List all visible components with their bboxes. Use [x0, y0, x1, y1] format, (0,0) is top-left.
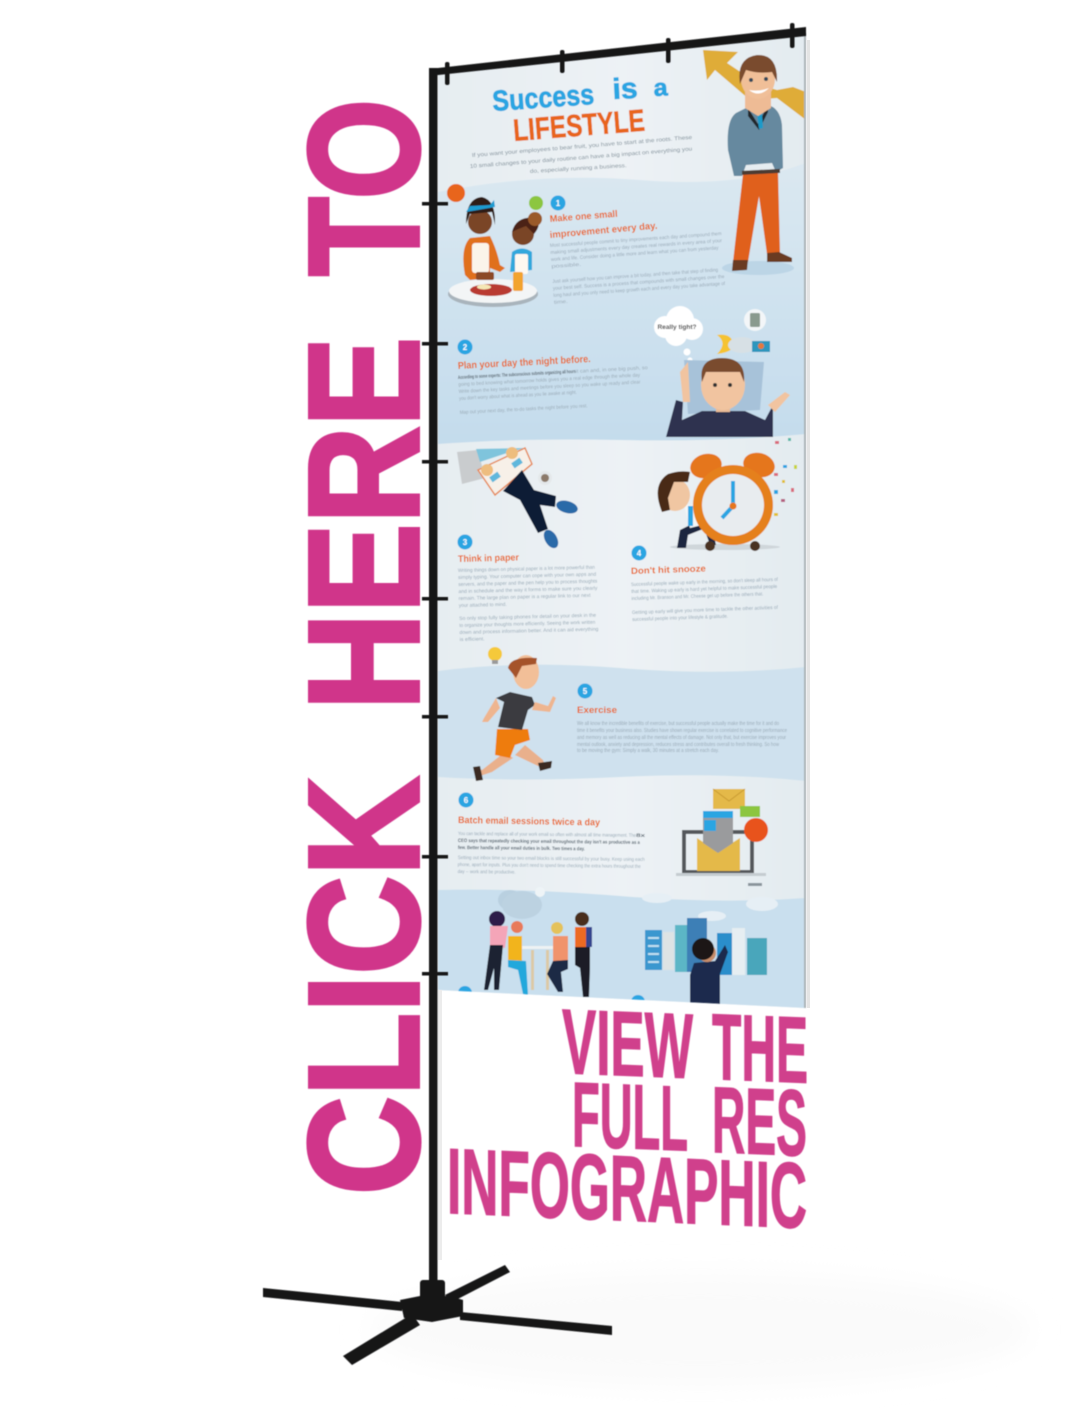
- pole: [429, 68, 438, 1293]
- step 3 body text: your attached to mind.: [459, 602, 507, 609]
- step 1 body text: [550, 231, 726, 306]
- step 4 illustration: alarm clock with boy: [658, 449, 780, 551]
- step 4 body text: Getting up early will give you more time to tackle the other activities of: [632, 605, 779, 616]
- step 1 body text: time.: [554, 299, 568, 306]
- step 2 body text: Write down the key tasks and meetings before you sleep so you wake up ready and clear: [459, 379, 641, 395]
- step 4 number badge: 4: [637, 549, 642, 558]
- side clamps: [422, 202, 448, 976]
- step 5 number badge: 5: [583, 687, 588, 696]
- step 3 body text: and in schedule and the way it forms to make sure you clearly: [458, 586, 598, 595]
- large vertical headline: CLICK: [277, 777, 452, 1195]
- large vertical headline: TO: [277, 99, 452, 276]
- step 2 illustration: thought bubbles: [654, 306, 770, 362]
- bottom scene: clouds: [498, 887, 778, 921]
- view the full res text: INFOGRAPHIC: [447, 1129, 807, 1248]
- title: a: [653, 74, 669, 102]
- view the full res text: FULL: [572, 1063, 688, 1171]
- banner right edge: [804, 33, 807, 1008]
- step 5 body text: We all know the incredible benefits of exercise, but successful people actually make the time for it and do: [577, 721, 779, 727]
- step 4 body text: Successful people wake up early in the morning, so don't sleep all hours of: [631, 577, 779, 588]
- step 4 number badge: [632, 546, 646, 560]
- step 4 body text: successful people into your lifestyle & gratitude.: [632, 614, 728, 623]
- confetti: [774, 438, 797, 516]
- step 2 body text: [458, 365, 650, 416]
- step 6 body text: 8x: [636, 833, 645, 839]
- step 6 number badge: 6: [464, 796, 469, 805]
- title: LIFESTYLE: [512, 103, 646, 148]
- title: Success: [491, 79, 595, 118]
- bottom scene: partial badges: [458, 986, 645, 1002]
- step 4 heading: Don't hit snooze: [631, 563, 706, 576]
- step 3 body text: to organize your thoughts more efficiently. Seeing the work written: [459, 620, 596, 629]
- title: [492, 76, 670, 142]
- large vertical headline: [277, 99, 452, 1195]
- intro text: [470, 135, 692, 175]
- title: is: [612, 73, 638, 106]
- step 1 body text: Just ask yourself how you can improve a bit today, and then take that step of finding: [552, 267, 718, 285]
- banner background bands: [438, 30, 808, 1010]
- step 1 heading: Make one small: [549, 209, 618, 225]
- step 1 illustration: cooking kids: [448, 197, 542, 307]
- step 2 body text: you don't worry about what is ahead as you lie awake at night.: [459, 390, 577, 402]
- step 5 body text: [577, 721, 787, 754]
- step 5 illustration: runner: [473, 647, 556, 781]
- step 2 number badge: 2: [463, 343, 468, 352]
- step 5 number badge: [578, 684, 592, 698]
- step 1 body text: long haul and you only need to keep growth each and every day you take advantage of: [553, 281, 726, 299]
- step 4 body text: [631, 577, 780, 623]
- step 1 body text: making small adjustments every day creates real rewards in every area of your: [550, 238, 723, 256]
- step 6 heading: Batch email sessions twice a day: [458, 815, 601, 828]
- top rail: [429, 27, 806, 76]
- step 2 body text: it can and, in one big push, so: [576, 365, 648, 375]
- step 6 body text: few. Better handle all your email duties in bulk. Two times a day.: [458, 845, 585, 852]
- step 2 number badge: [458, 340, 472, 354]
- step 6 illustration: email laptop: [676, 789, 768, 886]
- banner stand mockup infographic: RES: [712, 1067, 807, 1176]
- step 5 body text: time it benefits your business also. Studies have shown regular exercise is correlated to cognitive performance: [577, 728, 787, 734]
- step 1 body text: Most successful people commit to tiny improvements each day and compound them: [550, 231, 722, 249]
- banner fold highlight: [807, 40, 810, 1008]
- step 3 body text: Writing things down on physical paper is a lot more powerful than: [458, 565, 595, 574]
- intro text: do, especially running a business.: [530, 163, 627, 175]
- top clips: [445, 23, 794, 85]
- illustration: businessman: [722, 55, 794, 275]
- step 1 heading: [549, 209, 658, 241]
- large vertical headline: HERE: [277, 337, 452, 710]
- step 3 body text: servers, and the paper and the pen help you to process thoughts: [458, 579, 598, 588]
- step 3 number badge: [458, 534, 472, 550]
- bottom scene: city and man: [645, 918, 767, 1005]
- step 2 illustration: thought bubbles: Really tight?: [657, 324, 697, 331]
- step 3 body text: So only stop fully taking phones for detail on your desk in the: [459, 613, 596, 622]
- step 4 body text: including Mr. Branson and Mr. Cheese get up before the others that.: [631, 591, 763, 602]
- step 5 body text: to be moving the gym: Simply a walk, 30 minutes at a stretch each day.: [577, 748, 719, 754]
- bottom scene: group of people: [484, 911, 592, 997]
- step 2 body text: Map out your next day, the to-do tasks the night before you rest.: [460, 403, 588, 416]
- step 6 body text: day -- work and be productive.: [458, 869, 516, 876]
- step 6 body text: You can tackle and replace all of your work email so often with almost all time management. The: [458, 831, 636, 839]
- step 2 illustration: man in bed: [666, 358, 790, 437]
- banner stand hardware: [263, 23, 806, 1365]
- step 3 number badge: 3: [463, 538, 468, 547]
- step 3 body text: is efficient.: [460, 636, 485, 643]
- step 1 badges: [447, 184, 566, 210]
- step 3 illustration: man with paper: [457, 447, 579, 551]
- step 2 body text: According to some experts: The subconscious submits organizing all hours: [458, 369, 576, 381]
- step 1 badges: 1: [556, 199, 561, 208]
- banner stand mockup infographic: [262, 22, 810, 1366]
- step 6 body text: Setting out inbox time so your two email blocks is still successful by your busy. Keep using each: [458, 855, 645, 863]
- step 1 body text: possible.: [551, 262, 582, 270]
- step 5 body text: and memory as well as reducing all the mental effects of damage. Not only that, but exercise improves your: [577, 735, 786, 741]
- step 3 body text: [458, 565, 599, 643]
- step 1 body text: your best self. Success is a process that compounds with small changes over the: [553, 274, 725, 292]
- view the full res text: THE: [712, 994, 808, 1103]
- floor shadow: [370, 1275, 1030, 1385]
- step 3 body text: down and process information better. And it can aid everything: [459, 627, 599, 636]
- view the full res text: [447, 990, 808, 1248]
- step 1 heading: improvement every day.: [549, 221, 658, 241]
- step 5 heading: Exercise: [577, 705, 617, 716]
- illustration: success arrow: [703, 50, 806, 120]
- step 5 body text: mental outlook, anxiety and depression, reduces stress and contributes overall to fresh thinking. So how: [577, 742, 779, 748]
- step 3 heading: Think in paper: [458, 552, 519, 565]
- intro text: If you want your employees to bear fruit, you have to start at the roots. These: [472, 135, 692, 159]
- step 6 body text: [458, 831, 645, 877]
- step 2 heading: Plan your day the night before.: [458, 354, 591, 372]
- step 3 body text: simply typing. Your computer can cope with your own apps and: [458, 572, 596, 581]
- step 1 body text: work and life. Consider doing a little more and learn what you can from yesterday: [551, 245, 719, 263]
- stand base: [263, 1265, 612, 1365]
- intro text: 10 small changes to your daily routine can have a big impact on everything you: [470, 147, 692, 170]
- step 6 body text: CEO says that repeatedly checking your email throughout the day isn't as productive as a: [458, 838, 640, 846]
- strip beside pole: [438, 990, 442, 1260]
- step 2 body text: going to bed knowing what tomorrow holds gives you a real edge through the whole day: [458, 372, 641, 388]
- step 4 body text: that time. Waking up early is hard yet helpful to make successful people: [631, 584, 777, 595]
- view the full res text: VIEW: [562, 990, 693, 1098]
- step 3 body text: remain. The large plan on paper is a regular link to our next: [459, 593, 591, 602]
- printed banner: [438, 30, 808, 1010]
- step 6 number badge: [458, 792, 474, 808]
- step 6 body text: phone, apart for inputs. Plus you don't need to spend time checking the extra hours throughout the: [458, 862, 641, 870]
